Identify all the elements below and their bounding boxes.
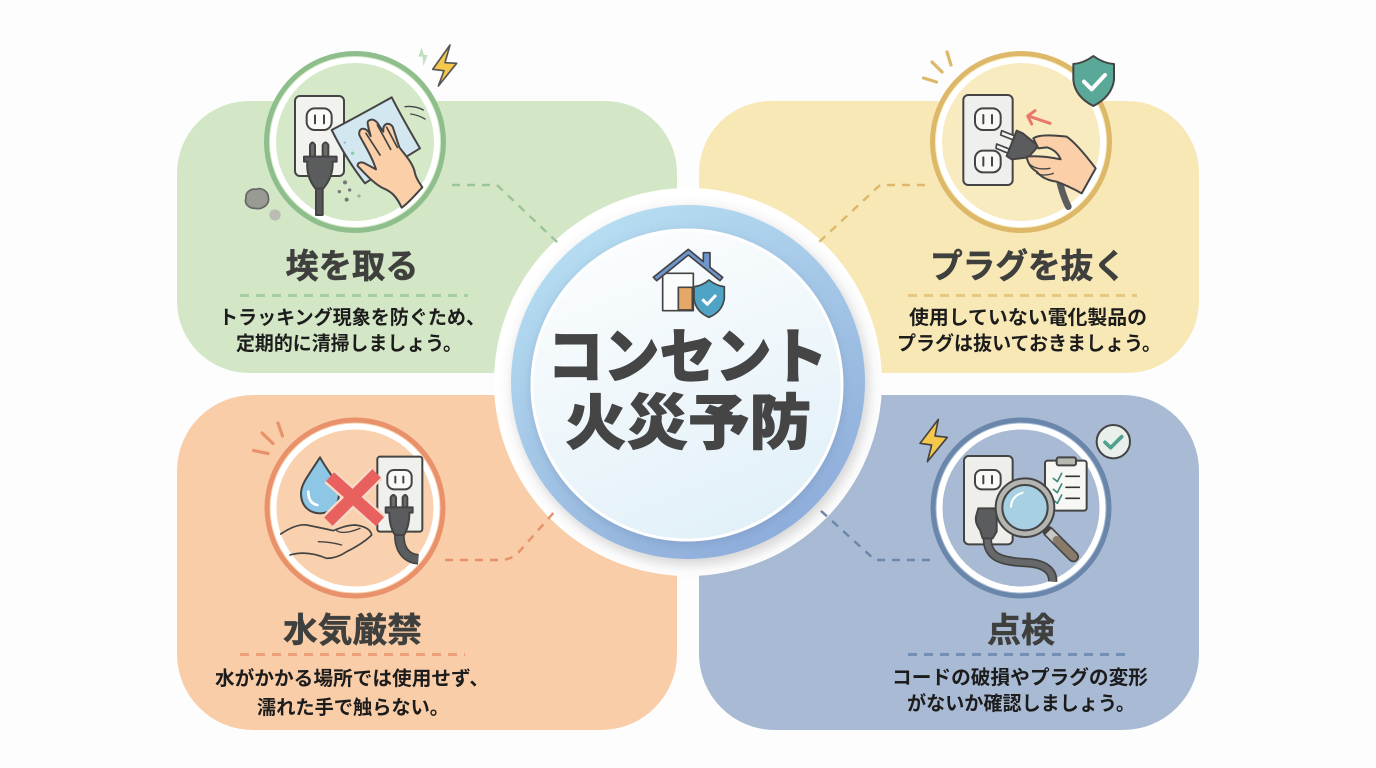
- heading: プラグを抜く: [930, 248, 1126, 286]
- description: [219, 306, 485, 355]
- divider: [240, 653, 465, 656]
- description: 濡れた手で触らない。: [257, 697, 449, 719]
- heading: 埃を取る: [286, 248, 418, 286]
- icon: alert rays: [924, 52, 951, 82]
- center hub: [511, 205, 865, 559]
- icon: pulling plug: [932, 54, 1110, 230]
- description: プラグは抜いておきましょう。: [897, 332, 1161, 355]
- divider: [908, 653, 1132, 656]
- panel: yellow background: [699, 101, 1199, 373]
- main title: コンセント: [548, 324, 828, 391]
- heading: 水気厳禁: [283, 612, 422, 650]
- description: がないか確認しましょう。: [907, 692, 1135, 715]
- icon: house with shield: [653, 249, 724, 317]
- description: 使用していない電化製品の: [909, 307, 1147, 329]
- description: [897, 307, 1161, 355]
- description: コードの破損やプラグの変形: [892, 666, 1148, 689]
- icon: check badge: [1097, 425, 1130, 458]
- card: keep away from water: [215, 420, 489, 719]
- icon: safety shield: [1073, 56, 1114, 106]
- connector: yellow: [818, 185, 925, 243]
- icon: cleaning outlet: [266, 54, 444, 230]
- heading: 点検: [987, 612, 1055, 650]
- center hub white backing: [494, 188, 882, 576]
- connector: orange: [445, 510, 556, 560]
- divider: [240, 294, 468, 297]
- description: トラッキング現象を防ぐため、: [219, 306, 485, 329]
- main title: [548, 324, 828, 457]
- description: 定期的に清掃しましょう。: [236, 332, 462, 355]
- panel: orange background: [177, 395, 677, 730]
- icon: lightning bolts: [418, 45, 457, 86]
- connector: blue: [820, 510, 930, 560]
- description: [215, 667, 489, 719]
- connector: green: [452, 185, 558, 243]
- main title: 火災予防: [565, 390, 811, 457]
- icon: magnifier inspecting outlet: [933, 420, 1109, 596]
- card: dust removal: [219, 45, 485, 355]
- divider: [908, 294, 1137, 297]
- card: unplug: [897, 52, 1161, 355]
- icon: dust clouds: [246, 189, 281, 221]
- panel: green background: [177, 101, 677, 373]
- card: inspection: [892, 419, 1148, 715]
- panel: blue background: [699, 395, 1199, 730]
- icon: lightning bolt: [920, 419, 947, 462]
- description: [892, 666, 1148, 715]
- icon: water warning: [267, 420, 443, 596]
- description: 水がかかる場所では使用せず、: [215, 667, 489, 690]
- icon: alert rays: [254, 423, 282, 454]
